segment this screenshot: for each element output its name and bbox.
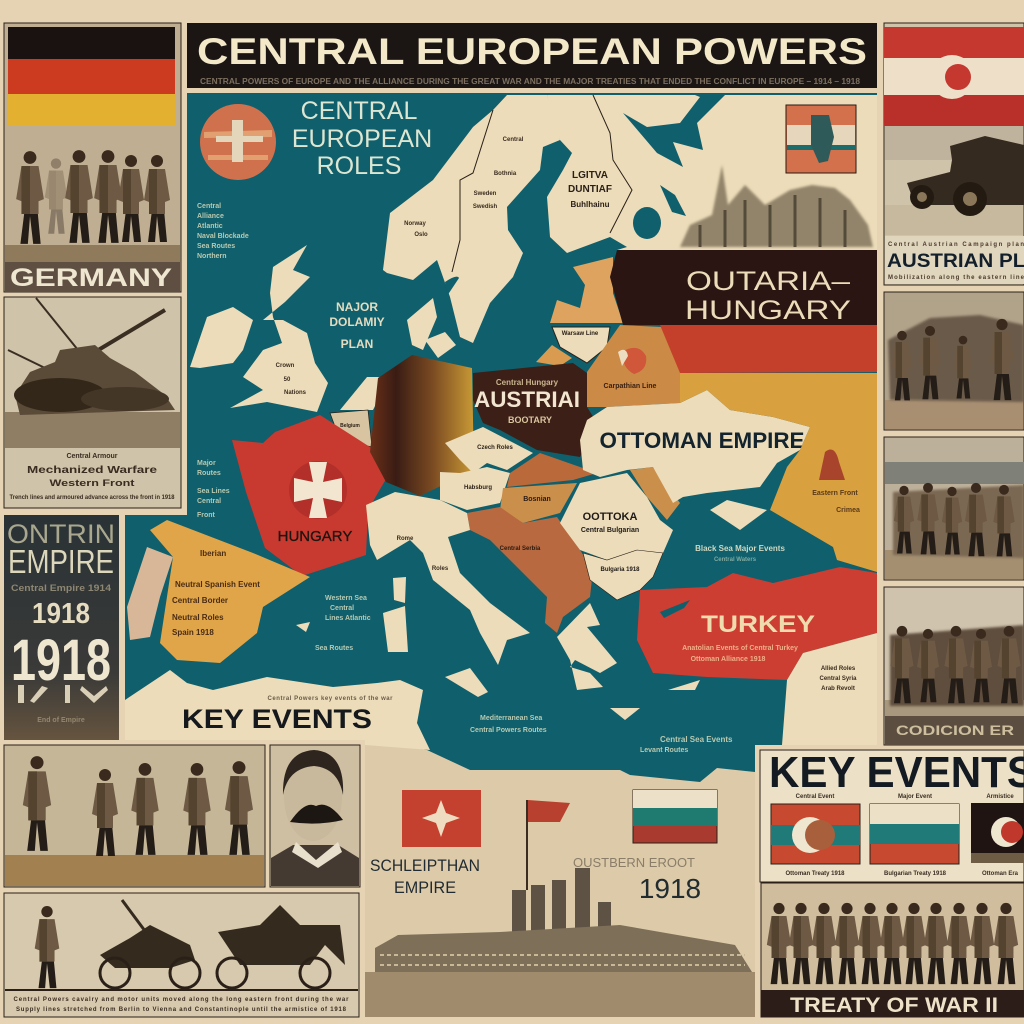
text: sea notes: Central — [197, 498, 221, 505]
land: Italy — [296, 492, 530, 697]
land: Great Britain: 50 — [284, 377, 291, 383]
flag: pole — [526, 800, 570, 890]
captions: Ottoman Treaty 1918 — [785, 871, 845, 877]
land: Italy: Rome — [397, 536, 414, 542]
label: Central European Roles: EUROPEAN — [292, 125, 432, 153]
panel: Empire 1918 — [4, 515, 119, 740]
land: Norway and Sweden: Swedish — [473, 204, 498, 210]
flag: Ottoman — [884, 27, 1024, 126]
land: Great Britain: Crown — [276, 363, 295, 369]
panel: right top — [884, 23, 1024, 285]
label: Black Sea: Black Sea Major Events — [695, 544, 785, 553]
panel: Key Events — [760, 748, 1024, 882]
title — [187, 23, 877, 88]
flag: Empire — [402, 790, 481, 847]
captions: Ottoman Era — [982, 871, 1019, 877]
text: sea notes: Central Powers Routes — [470, 727, 547, 734]
banner: Austria-Hungary: HUNGARY — [685, 295, 851, 325]
label: Germany — [5, 262, 180, 292]
land: Great Britain — [230, 245, 328, 412]
land: Portugal — [127, 547, 173, 640]
text: sea notes: Central — [197, 203, 221, 210]
banner: Austria-Hungary — [610, 250, 877, 572]
label: Austrian Plan: Mobilization along the eastern line — [888, 275, 1024, 281]
label: Austrian Plan — [885, 236, 1024, 284]
label: 1918: 1918 — [639, 873, 701, 904]
text: sea notes: Western Sea — [325, 595, 367, 602]
title: CENTRAL EUROPEAN POWERS — [197, 31, 867, 72]
captions: Major Event — [898, 794, 932, 800]
text: sea notes: Sea Lines — [197, 488, 230, 495]
land: Low Countries — [330, 377, 390, 447]
land: Ottoman Empire — [580, 390, 810, 530]
sea: White Sea and lakes — [623, 93, 727, 239]
flag: Germany — [8, 27, 175, 126]
land: Levant: Arab Revolt — [821, 686, 855, 692]
land: Austria: BOOTARY — [508, 415, 552, 425]
land: Norway and Sweden — [383, 95, 560, 343]
land: Spain: Neutral Roles — [172, 613, 224, 622]
text: sea notes: Alliance — [197, 213, 224, 220]
text: sea notes: Atlantic — [197, 223, 223, 230]
banner: Austria-Hungary: Crimea — [836, 507, 860, 514]
land: Baltic states — [536, 257, 623, 366]
label: Treaty of War — [761, 990, 1024, 1017]
captions: Bulgarian Treaty 1918 — [884, 871, 947, 877]
land: Central states: OOTTOKA — [583, 511, 637, 523]
land: Baltic states: Warsaw Line — [562, 331, 599, 337]
flag: black — [971, 803, 1024, 863]
label: Schleipthan Empire: EMPIRE — [394, 878, 456, 897]
label: Central European Roles: CENTRAL — [301, 97, 417, 125]
label: Major Diplomacy Plan — [329, 300, 385, 351]
title: CENTRAL POWERS OF EUROPE AND THE ALLIANCE DURING THE GREAT WAR AND THE MAJOR TREATIES THAT ENDED THE CONFLICT IN EUROPE – 1914 – 1918 — [200, 77, 861, 86]
panel: map — [125, 93, 877, 782]
illustration: tank — [8, 298, 175, 415]
text: tank caption: Mechanized Warfare — [27, 465, 158, 476]
panel: bottom left cavalry — [4, 893, 359, 1017]
land: France — [232, 415, 393, 576]
text: sea notes: Front — [197, 512, 216, 519]
panel: bottom center paper — [365, 740, 755, 1017]
text: sea notes — [197, 203, 733, 754]
land: Spain: Neutral Spanish Event — [175, 580, 260, 589]
label: Austrian Plan: Central Austrian Campaign plan — [888, 242, 1024, 248]
label: Major Diplomacy Plan: DOLAMIY — [329, 315, 385, 329]
banner: Austria-Hungary: Eastern Front — [812, 490, 858, 497]
label: Central European Roles: ROLES — [317, 152, 401, 180]
land: Ireland — [190, 307, 253, 368]
label: Schleipthan Empire — [370, 856, 480, 897]
land: Central states: Czech Roles — [477, 445, 513, 451]
emblem: roundel — [200, 104, 276, 180]
panel: bottom center — [365, 790, 755, 1017]
land: Austria: Central Hungary — [496, 378, 559, 387]
text: sea notes: Routes — [197, 470, 221, 477]
panel: portrait — [270, 745, 360, 887]
panel: bottom left cavalry: Supply lines stretched from Berlin to Vienna and Constantinople until the armistice of 1918 — [16, 1007, 347, 1013]
banner: Austria-Hungary: OUTARIA– — [686, 266, 850, 296]
text: sea notes: Central — [330, 605, 354, 612]
panel: bottom left cavalry: Central Powers cavalry and motor units moved along the long eastern front during the war — [14, 997, 349, 1003]
panel: right battle 2 — [884, 437, 1024, 580]
label: Schleipthan Empire: SCHLEIPTHAN — [370, 856, 480, 875]
land: Norway and Sweden: Oslo — [414, 232, 428, 238]
land: Central states: Central Bulgarian — [581, 527, 639, 534]
land: Greece — [557, 603, 617, 690]
label: Germany: GERMANY — [10, 264, 172, 292]
label: Treaty of War: TREATY OF WAR II — [790, 994, 998, 1017]
panel: Empire 1918: 1918 — [11, 628, 111, 693]
land: Finland and Russia: Buhlhainu — [570, 200, 610, 209]
land: Austria — [473, 363, 597, 457]
land: Germany — [370, 355, 474, 496]
text: tank caption: Trench lines and armoured advance across the front in 1918 — [10, 495, 175, 501]
panel: Empire 1918: ONTRIN — [7, 519, 115, 549]
captions: Armistice — [986, 794, 1014, 800]
panel: Empire 1918: End of Empire — [37, 717, 85, 724]
land: North Africa — [125, 670, 430, 750]
land: Central states: Central Serbia — [500, 546, 541, 552]
text: sea notes: Sea Routes — [315, 645, 353, 652]
text: sea notes: Lines Atlantic — [325, 615, 371, 622]
text: sea notes: Naval Blockade — [197, 233, 249, 240]
text: sea notes: Central Sea Events — [660, 735, 733, 744]
land: Turkey: TURKEY — [701, 611, 815, 638]
label: Major Diplomacy Plan: NAJOR — [336, 300, 378, 314]
land: Great Britain: Nations — [284, 390, 307, 396]
panel: Treaty of War — [761, 883, 1024, 1017]
land: Denmark — [407, 298, 456, 358]
label: Key Events on map: KEY EVENTS — [182, 704, 372, 734]
land: Central states: Bulgaria 1918 — [600, 567, 640, 573]
label: Key Events on map — [182, 696, 393, 734]
label: 1918 — [573, 855, 701, 904]
flag: crescent — [771, 804, 860, 864]
label: Central European Roles — [292, 97, 432, 180]
text: tank caption — [10, 453, 175, 501]
emblem: flag on Russia — [786, 105, 856, 173]
label: 1918: OUSTBERN EROOT — [573, 855, 695, 870]
land: Finland and Russia: DUNTIAF — [568, 184, 612, 195]
land: Finland and Russia: LGITVA — [572, 170, 608, 181]
label: Key Events on map: Central Powers key events of the war — [268, 696, 393, 702]
panel: bottom left scene — [4, 745, 265, 887]
text: sea notes: Sea Routes — [197, 243, 235, 250]
panel: Empire 1918: 1918 — [32, 598, 90, 630]
land: Aegean and Cyprus islands — [610, 680, 700, 720]
text: sea notes: Levant Routes — [640, 747, 688, 754]
land: Low Countries: Belgium — [340, 423, 360, 429]
land: Central states: Habsburg — [464, 485, 492, 491]
label: Major Diplomacy Plan: PLAN — [341, 337, 373, 351]
land: Finland and Russia — [547, 95, 877, 253]
land: Spain: Spain 1918 — [172, 628, 214, 637]
land: Levant: Central Syria — [819, 676, 857, 682]
illustration: palace — [365, 868, 755, 1017]
label: Black Sea — [695, 544, 785, 563]
captions — [785, 794, 1019, 877]
land: Poland region — [587, 325, 683, 407]
illustration: car — [885, 126, 1024, 235]
land: Turkey — [637, 567, 877, 680]
panel: right Ottoman troops: CODICION ER — [896, 722, 1014, 738]
text: sea notes: Major — [197, 460, 216, 467]
label: Black Sea: Central Waters — [714, 557, 757, 563]
land: Austria: AUSTRIAI — [474, 387, 580, 412]
flag: Bulgaria — [633, 790, 717, 843]
land: Spain — [150, 520, 310, 663]
panel: tank — [4, 297, 181, 508]
land: Ottoman Empire: OTTOMAN EMPIRE — [600, 428, 804, 453]
text: tank caption: Central Armour — [66, 453, 118, 460]
flag: tricolour — [870, 804, 959, 864]
land: Norway and Sweden: Central — [503, 137, 524, 143]
text: tank caption: Western Front — [50, 478, 134, 488]
panel: Empire 1918: EMPIRE — [8, 543, 114, 580]
land: Norway and Sweden: Norway — [404, 221, 426, 227]
text: sea notes: Mediterranean Sea — [480, 715, 542, 722]
land: Levant — [782, 633, 877, 745]
land: Norway and Sweden: Bothnia — [494, 171, 517, 177]
land: Turkey: Anatolian Events of Central Turkey — [682, 645, 798, 652]
land: Poland region: Carpathian Line — [604, 383, 657, 390]
land: Central states — [440, 427, 680, 633]
captions: Central Event — [796, 794, 834, 800]
land: Norway and Sweden: Sweden — [474, 191, 497, 197]
land: Spain: Central Border — [172, 596, 228, 605]
illustration: soldiers — [5, 150, 180, 265]
land: Central states: Bosnian — [523, 496, 551, 503]
panel: Germany — [4, 23, 181, 292]
panel: right Ottoman troops — [884, 587, 1024, 745]
land: France: HUNGARY — [278, 528, 352, 545]
land: Levant: Allied Roles — [821, 666, 856, 672]
land: Spain: Iberian — [200, 549, 226, 558]
illustration: Russian skyline — [680, 165, 873, 247]
panel: Empire 1918: Central Empire 1914 — [11, 583, 111, 593]
text: sea notes: Northern — [197, 253, 227, 260]
land: Italy: Roles — [432, 566, 449, 572]
land: Turkey: Ottoman Alliance 1918 — [691, 656, 766, 663]
panel: right battle 1 — [884, 292, 1024, 430]
